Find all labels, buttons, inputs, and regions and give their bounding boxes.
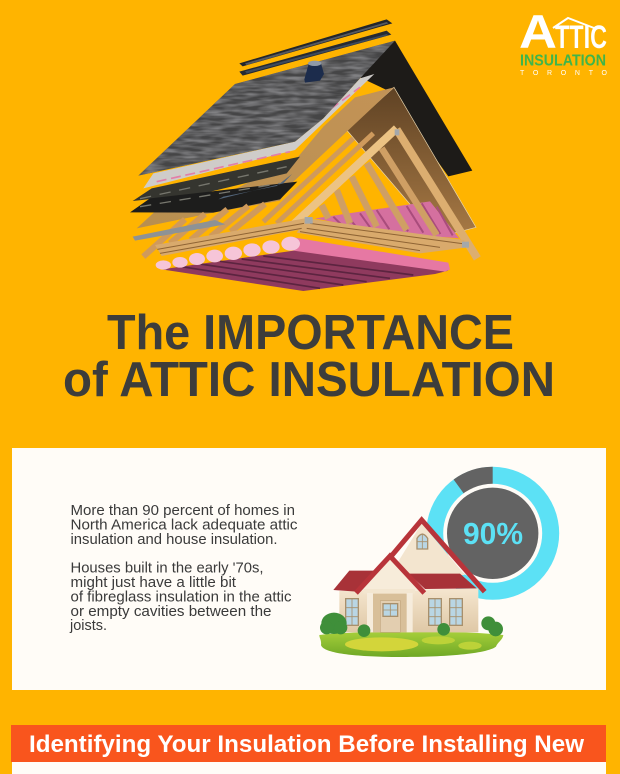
text block: statistic description: might just have a little bit: [70, 575, 236, 591]
panel: 90 percent statistic: [12, 448, 606, 690]
ridge vent strips: [239, 19, 392, 76]
logo word: ATTIC: A: [519, 5, 557, 58]
porch: [360, 557, 422, 591]
text block: statistic description: [69, 503, 298, 634]
title: of ATTIC INSULATION: [63, 353, 555, 407]
text block: statistic description: More than 90 percent of homes in: [70, 503, 295, 519]
logo roofline: [553, 18, 594, 28]
front osb sheathing: [137, 87, 394, 228]
side roofs: [333, 571, 477, 592]
text block: statistic description: joists.: [69, 618, 107, 634]
house walls: [339, 588, 478, 632]
icon: house on lawn: [319, 520, 503, 657]
text block: statistic description: or empty cavities between the: [70, 604, 272, 620]
pink attic insulation inside truss: [315, 201, 459, 238]
pink and white underlayment: [143, 74, 374, 188]
title: [63, 306, 555, 407]
upper gable: [390, 523, 465, 575]
logo word: INSULATION: INSULATION: [520, 52, 606, 70]
metal drip edge: [133, 220, 225, 241]
logo: Attic Insulation Toronto: [519, 5, 608, 77]
section heading: Identifying Your Insulation Before Installing New: [29, 731, 584, 758]
osb back panel: [347, 87, 476, 237]
illustration: exploded roof layers: [130, 19, 477, 291]
pink stripes: [333, 203, 453, 235]
donut chart: 90%: 90%: [463, 516, 523, 551]
black felt layers: [130, 157, 300, 213]
text block: statistic description: Houses built in the early '70s,: [70, 560, 264, 576]
donut chart: 90%: [426, 467, 559, 600]
door: [380, 601, 400, 632]
windows: [346, 533, 462, 625]
lawn highlights: [345, 637, 418, 651]
text block: statistic description: North America lack adequate attic: [70, 518, 298, 534]
grey shingles: [138, 41, 395, 176]
bushes: [320, 613, 503, 637]
title: The IMPORTANCE: [107, 306, 514, 360]
text block: statistic description: of fibreglass insulation in the attic: [70, 590, 292, 606]
black underlayment back panel: [358, 41, 472, 176]
main gable trim: [392, 520, 485, 592]
text block: statistic description: insulation and house insulation.: [70, 532, 278, 548]
lower pink insulation batts: [156, 237, 450, 291]
roof trusses: [143, 128, 477, 258]
logo word: TORONTO: TORONTO: [520, 70, 608, 77]
lawn: [319, 632, 503, 657]
roof vent: [304, 61, 324, 83]
section heading: [11, 725, 606, 762]
panel: lower white section: [12, 762, 606, 774]
